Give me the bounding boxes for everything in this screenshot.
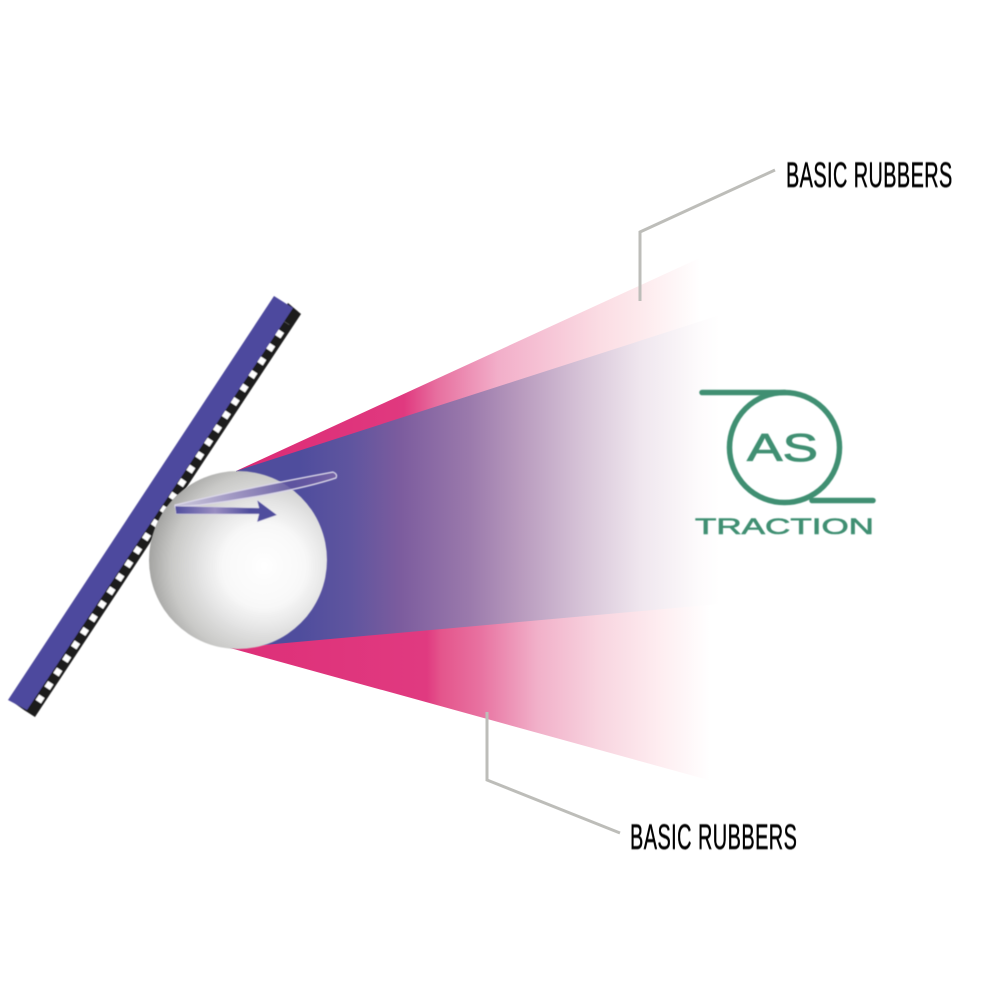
logo ring <box>730 392 840 502</box>
leader line: top <box>640 170 775 301</box>
logo top bar <box>702 390 785 395</box>
arrow <box>175 500 277 522</box>
leader line: bottom <box>487 712 620 833</box>
label: bottom: BASIC RUBBERS <box>630 818 797 858</box>
racket blue rubber <box>8 296 293 710</box>
bottom pink cone <box>230 596 712 781</box>
racket: rubber and sponge <box>8 296 301 717</box>
sponge pimples <box>38 323 287 702</box>
racket sponge strip <box>10 303 301 717</box>
spin arrows on ball <box>175 472 337 522</box>
logo AS lettering: AS <box>747 427 818 470</box>
ball <box>149 471 327 649</box>
logo TRACTION lettering: TRACTION <box>695 514 874 539</box>
top pink cone <box>236 256 712 471</box>
swoosh trail <box>175 472 337 507</box>
logo bottom bar <box>812 498 873 503</box>
logo: AS Traction <box>695 392 874 539</box>
central blue-purple cone <box>230 315 720 648</box>
label: top: BASIC RUBBERS <box>786 156 952 196</box>
